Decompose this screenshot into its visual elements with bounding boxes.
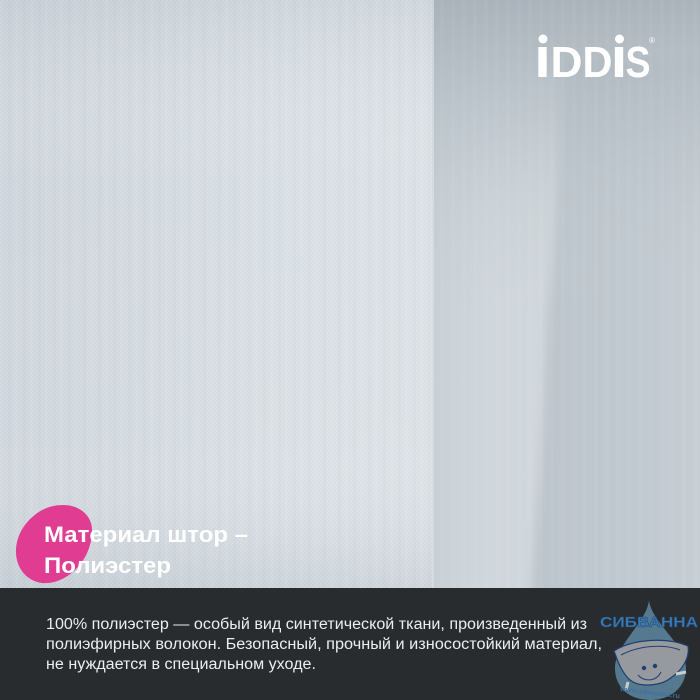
logo: IDDIS: D	[550, 38, 582, 87]
dark footer bar	[0, 588, 700, 700]
watermark: Сибванна logo	[600, 600, 698, 700]
description text: полиэфирных волокон. Безопасный, прочный и износостойкий материал,	[46, 636, 602, 653]
logo: IDDIS	[534, 34, 655, 87]
pink blob accent	[16, 505, 92, 583]
description text	[46, 616, 602, 673]
description text: не нуждается в специальном уходе.	[46, 656, 316, 673]
logo: IDDIS: D	[582, 38, 612, 87]
bathtub	[614, 640, 688, 690]
fabric background: draped right panel	[432, 0, 700, 610]
fabric background: woven left panel	[0, 0, 432, 588]
heading: material: Материал штор –	[44, 522, 248, 547]
water drop	[615, 600, 686, 700]
logo: IDDIS: ®	[649, 36, 655, 45]
watermark name: СИБВАННА	[600, 614, 698, 631]
logo: IDDIS: I	[534, 38, 550, 87]
watermark url: www.sibvanna.ru	[619, 686, 680, 700]
logo: IDDIS: S	[626, 38, 650, 87]
logo: IDDIS: I	[611, 38, 627, 87]
heading: material: Полиэстер	[44, 553, 171, 578]
heading: material	[44, 522, 248, 578]
description text: 100% полиэстер — особый вид синтетической ткани, произведенный из	[46, 616, 587, 633]
